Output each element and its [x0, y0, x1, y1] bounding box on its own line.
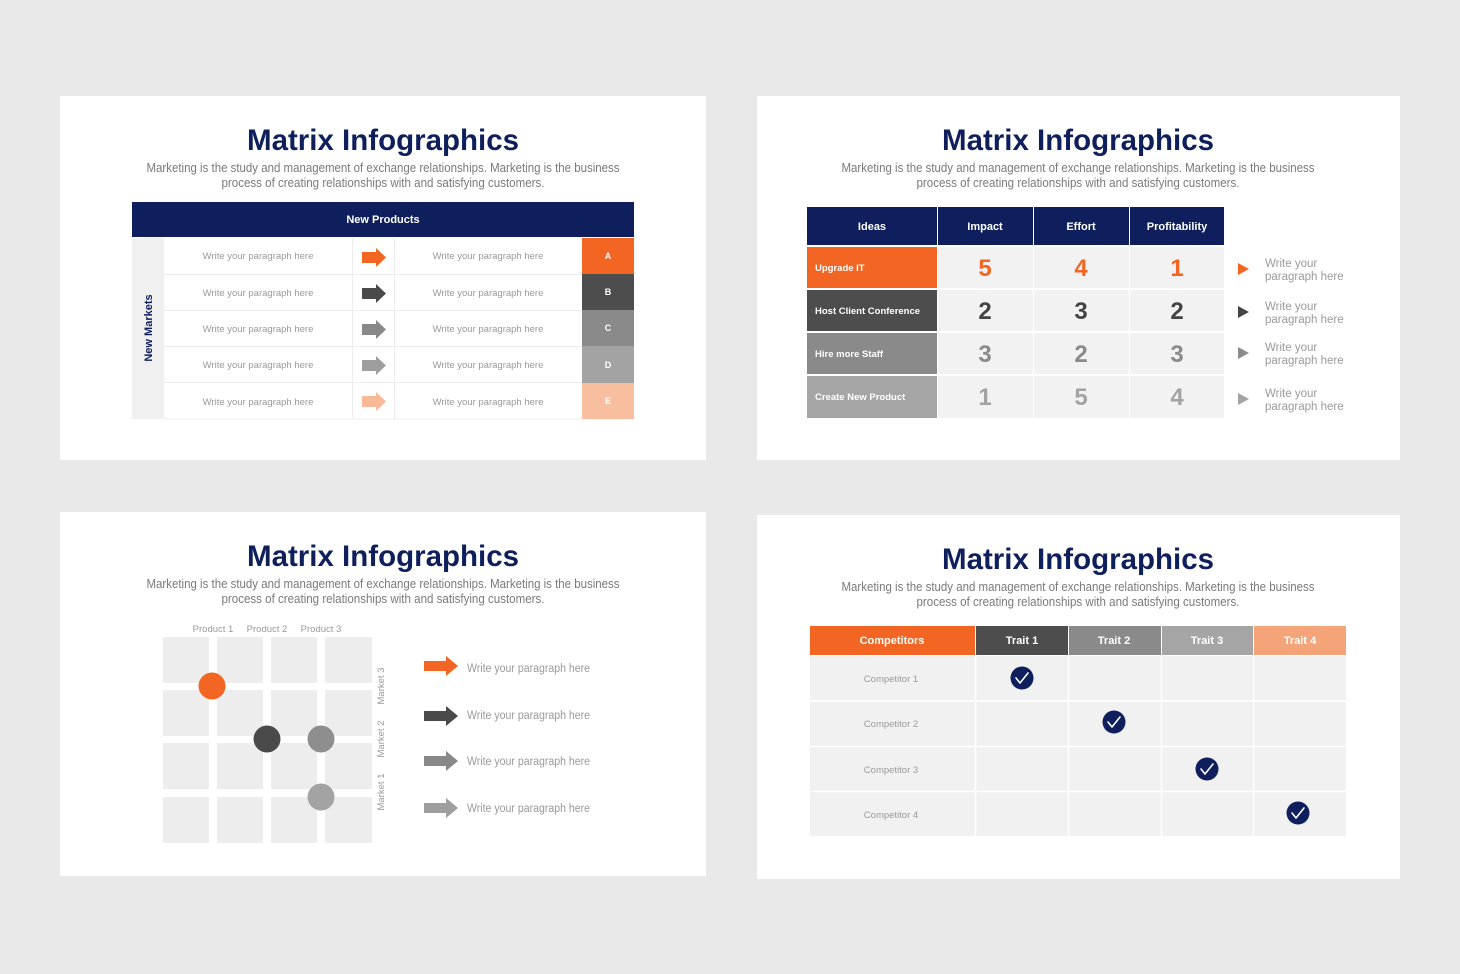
subtitle: Marketing is the study and management of exchange relationships. Marketing is the business — [842, 580, 1314, 594]
grid chart — [163, 624, 387, 843]
grid chart: Product 1 — [193, 624, 233, 635]
table header: New Products: New Products — [346, 214, 420, 226]
legend arrows: Write your paragraph here — [467, 756, 590, 768]
table rows: Write your paragraph here — [203, 397, 313, 408]
subtitle: process of creating relationships with and satisfying customers. — [916, 176, 1240, 190]
letter tags — [582, 238, 634, 419]
title: Matrix Infographics — [247, 124, 519, 157]
legend arrows: Write your paragraph here — [467, 803, 590, 815]
subtitle: process of creating relationships with and satisfying customers. — [222, 176, 544, 190]
legend arrows: Write your paragraph here — [467, 710, 590, 722]
notes with triangle markers: paragraph here — [1265, 314, 1344, 326]
legend arrows — [424, 656, 590, 818]
subtitle: Marketing is the study and management of exchange relationships. Marketing is the business — [842, 161, 1314, 175]
idea rows: Host Client Conference — [815, 306, 920, 317]
subtitle — [842, 161, 1314, 190]
panel: ideas scoring matrix — [757, 96, 1400, 460]
notes with triangle markers — [1238, 258, 1344, 413]
panel: competitor traits — [757, 515, 1400, 879]
letter tags: E — [605, 396, 611, 406]
table rows — [164, 238, 634, 419]
competitor rows: Competitor 2 — [864, 719, 918, 730]
trait header — [810, 626, 1346, 655]
trait header: Trait 1 — [1006, 635, 1038, 647]
arrows — [362, 248, 386, 411]
idea rows: 1 — [1170, 255, 1184, 282]
grid chart: Market 2 — [376, 721, 387, 757]
table header: Impact — [967, 221, 1003, 233]
grid chart: Market 3 — [376, 668, 387, 704]
notes with triangle markers: paragraph here — [1265, 271, 1344, 283]
subtitle: Marketing is the study and management of exchange relationships. Marketing is the business — [146, 161, 620, 175]
table rows: Write your paragraph here — [203, 324, 313, 335]
idea rows: 4 — [1170, 384, 1184, 411]
table rows: Write your paragraph here — [203, 288, 313, 299]
idea rows — [807, 247, 1224, 418]
idea rows: 2 — [978, 298, 992, 325]
idea rows: 1 — [978, 384, 992, 411]
competitor rows: Competitor 3 — [864, 765, 918, 776]
notes with triangle markers: Write your — [1265, 342, 1317, 354]
idea rows: 5 — [1074, 384, 1088, 411]
subtitle — [146, 161, 620, 190]
grid chart: Product 3 — [301, 624, 341, 635]
table rows: Write your paragraph here — [433, 397, 543, 408]
panel: product-market grid — [60, 512, 706, 876]
idea rows: Upgrade IT — [815, 263, 865, 274]
notes with triangle markers: paragraph here — [1265, 401, 1344, 413]
subtitle — [842, 580, 1314, 609]
table header: Profitability — [1147, 221, 1208, 233]
letter tags: D — [605, 360, 612, 370]
trait header: Trait 2 — [1098, 635, 1130, 647]
title: Matrix Infographics — [247, 540, 519, 573]
table rows: Write your paragraph here — [203, 360, 313, 371]
table header — [807, 207, 1224, 245]
side label: New Markets — [132, 238, 164, 419]
competitor rows: Competitor 4 — [864, 810, 918, 821]
idea rows: 4 — [1074, 255, 1088, 282]
trait header: Trait 3 — [1191, 635, 1223, 647]
idea rows: 2 — [1074, 341, 1088, 368]
title: Matrix Infographics — [942, 543, 1214, 576]
subtitle: Marketing is the study and management of exchange relationships. Marketing is the business — [146, 577, 620, 591]
idea rows: 5 — [978, 255, 992, 282]
competitor rows — [810, 656, 1346, 836]
table header: New Products — [132, 202, 634, 237]
table header: Ideas — [858, 221, 886, 233]
notes with triangle markers: Write your — [1265, 388, 1317, 400]
table header: Effort — [1066, 221, 1096, 233]
check icons — [1010, 666, 1310, 824]
table rows: Write your paragraph here — [433, 360, 543, 371]
letter tags: C — [605, 323, 612, 333]
idea rows: Hire more Staff — [815, 349, 884, 360]
title: Matrix Infographics — [942, 124, 1214, 157]
table rows: Write your paragraph here — [433, 288, 543, 299]
trait header: Trait 4 — [1284, 635, 1317, 647]
idea rows: 3 — [978, 341, 992, 368]
grid chart: Product 2 — [247, 624, 287, 635]
grid chart: Market 1 — [376, 774, 387, 810]
competitor rows: Competitor 1 — [864, 674, 918, 685]
table rows: Write your paragraph here — [203, 251, 313, 262]
table rows: Write your paragraph here — [433, 251, 543, 262]
idea rows: 3 — [1170, 341, 1184, 368]
subtitle: process of creating relationships with and satisfying customers. — [916, 595, 1240, 609]
idea rows: 3 — [1074, 298, 1088, 325]
legend arrows: Write your paragraph here — [467, 663, 590, 675]
subtitle — [146, 577, 620, 606]
idea rows: 2 — [1170, 298, 1184, 325]
idea rows: Create New Product — [815, 392, 906, 403]
panel: new products matrix — [60, 96, 706, 460]
notes with triangle markers: Write your — [1265, 301, 1317, 313]
notes with triangle markers: paragraph here — [1265, 355, 1344, 367]
trait header: Competitors — [860, 635, 924, 647]
letter tags: B — [605, 287, 612, 297]
letter tags: A — [605, 251, 612, 261]
side label: New Markets: New Markets — [143, 294, 155, 362]
table rows: Write your paragraph here — [433, 324, 543, 335]
subtitle: process of creating relationships with and satisfying customers. — [222, 592, 544, 606]
notes with triangle markers: Write your — [1265, 258, 1317, 270]
